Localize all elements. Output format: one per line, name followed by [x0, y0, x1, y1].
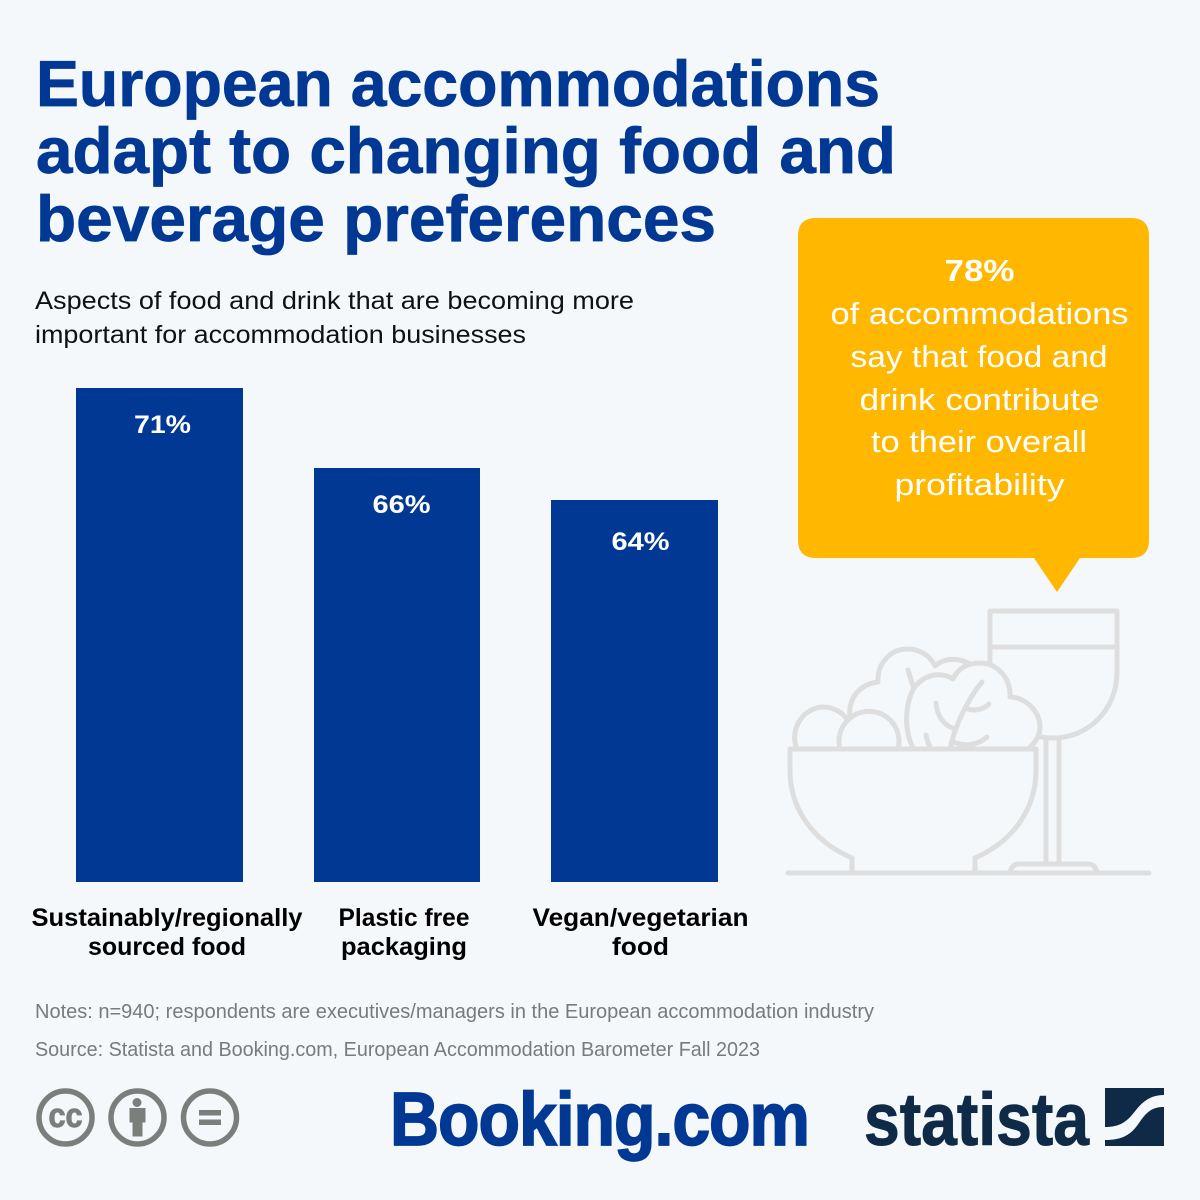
source: Source: Statista and Booking.com, European Accommodation Barometer Fall 2023	[35, 1039, 760, 1061]
bar labels: Vegan/vegetarian	[532, 904, 748, 932]
bar labels: Sustainably/regionally	[32, 904, 303, 932]
title	[36, 47, 896, 255]
icon: statista mark	[1105, 1088, 1164, 1146]
icon: wine glass	[990, 611, 1117, 873]
subtitle	[35, 287, 634, 349]
icon: bowl	[790, 749, 1036, 873]
subtitle: Aspects of food and drink that are becoming more	[35, 287, 634, 315]
subtitle: important for accommodation businesses	[35, 321, 526, 349]
icon: fruits	[795, 707, 899, 749]
icon: table line	[788, 870, 1149, 876]
logo: Statista: statista	[864, 1078, 1090, 1161]
icon: salad bowl and wine glass	[788, 611, 1149, 873]
bar: sustainably/regionally sourced food 71%: 71%	[134, 411, 191, 439]
callout: say that food and	[850, 339, 1108, 374]
bar: plastic free packaging 66%	[314, 468, 480, 882]
callout: drink contribute	[860, 382, 1100, 417]
title: European accommodations	[36, 47, 880, 120]
bar labels	[32, 904, 748, 961]
icon: cc: cc	[48, 1097, 82, 1135]
logo: Booking.com: Booking.com	[390, 1078, 810, 1162]
bar labels: Plastic free	[338, 904, 470, 932]
bar: plastic free packaging 66%: 66%	[372, 491, 430, 519]
icon: no derivatives equals	[184, 1091, 236, 1144]
callout: to their overall	[871, 424, 1087, 459]
bar labels: packaging	[341, 933, 467, 961]
bar: vegan/vegetarian food 64%	[551, 500, 718, 882]
bar labels: sourced food	[88, 933, 246, 961]
callout: profitability	[894, 467, 1065, 502]
icon: salad leaves	[850, 649, 1040, 749]
icon: cc	[39, 1091, 92, 1144]
notes: Notes: n=940; respondents are executives/managers in the European accommodation industry	[35, 1001, 874, 1023]
bar chart	[76, 388, 718, 882]
notes and source	[35, 1001, 874, 1061]
bar labels: food	[612, 933, 669, 961]
title: adapt to changing food and	[36, 114, 896, 187]
callout: of accommodations	[830, 296, 1128, 331]
bar: vegan/vegetarian food 64%: 64%	[612, 528, 670, 556]
bar: sustainably/regionally sourced food 71%	[76, 388, 243, 882]
callout: 78%	[944, 253, 1014, 288]
title: beverage preferences	[36, 182, 716, 255]
icon: creative commons licences	[39, 1091, 236, 1144]
icon: attribution person	[111, 1091, 164, 1144]
callout	[798, 218, 1149, 592]
